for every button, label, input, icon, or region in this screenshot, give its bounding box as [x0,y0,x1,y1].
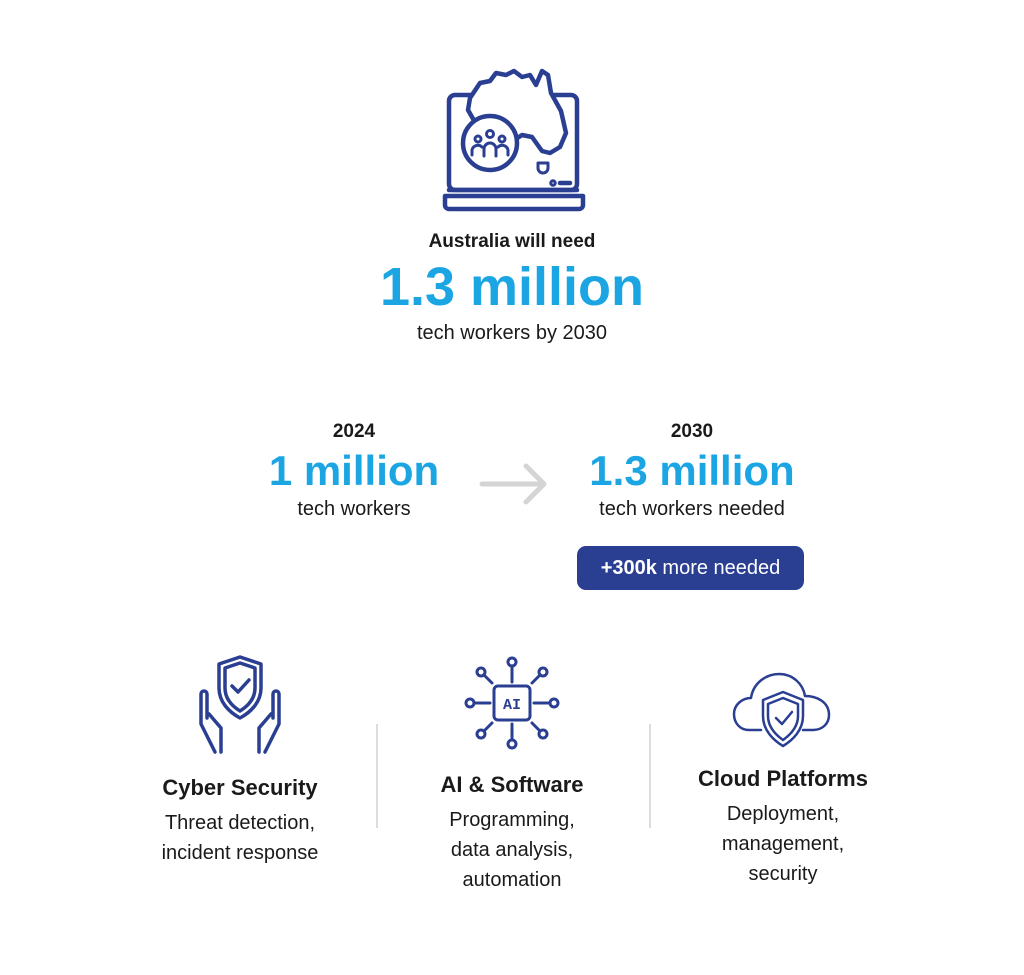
panel: cyber security [162,655,318,864]
icon: shield in hands [199,655,281,754]
icon: AI chip [464,656,560,750]
panel: cloud platforms: security [749,863,817,885]
dividers [376,724,378,828]
panel: AI & software [440,656,584,891]
panel: AI & software: automation [463,869,561,891]
icon: AI chip: AI [503,697,521,714]
2024 stat: 1 million [269,447,439,494]
panel: cloud platforms [698,672,868,885]
panel: AI & software: data analysis, [451,839,573,861]
2030 stat: 2030 [671,421,713,442]
2030 stat [589,421,795,520]
title block: 1.3 million [380,257,644,317]
title block: tech workers by 2030 [417,322,607,344]
panel: cloud platforms: Cloud Platforms [698,766,868,791]
2030 stat: 1.3 million [589,447,795,494]
panel: AI & software: Programming, [449,809,575,831]
panel: cyber security: incident response [162,842,318,864]
2024 stat: 2024 [333,421,375,442]
panel: AI & software: AI & Software [440,772,584,797]
arrow [480,464,546,504]
panel: cyber security: Cyber Security [162,775,318,800]
badge: +300k more needed [601,557,780,579]
2024 stat: tech workers [297,498,411,520]
panel: cloud platforms: management, [722,833,844,855]
title block: Australia will need [429,231,595,252]
2030 stat: tech workers needed [599,498,785,520]
icon: cloud shield [732,672,830,748]
title block [380,231,644,344]
icon: laptop with Australia map [442,68,586,212]
badge [577,546,804,590]
panel: cyber security: Threat detection, [165,812,315,834]
2024 stat [269,421,439,520]
panel: cloud platforms: Deployment, [727,803,839,825]
